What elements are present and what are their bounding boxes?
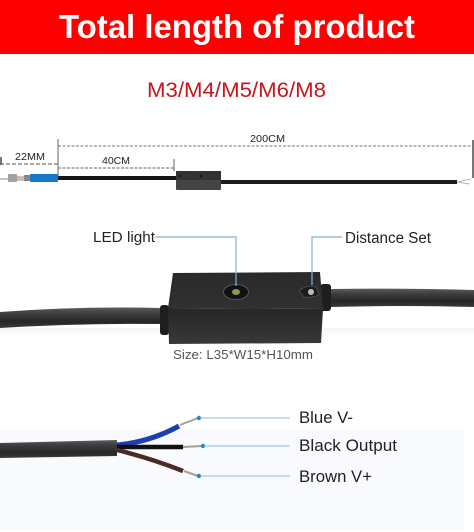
label: LED light (93, 229, 236, 286)
dimension: 40CM: 40CM (102, 155, 130, 167)
subtitle: thread sizes: M3/M4/M5/M6/M8 (147, 78, 326, 102)
distance dial (299, 286, 319, 297)
dimension: 22MM: 22MM (15, 151, 45, 163)
sensor box photo (0, 272, 474, 344)
label: Blue V-: Blue V- (299, 408, 353, 427)
brown wire (117, 450, 183, 471)
label: Brown V+ (197, 467, 372, 486)
stripped ends (180, 418, 202, 476)
dimension diagram (0, 133, 474, 190)
shadow under cable (0, 328, 474, 338)
cable to control box (58, 176, 176, 180)
cable to wire end (221, 179, 471, 184)
right collar (320, 284, 331, 311)
label: Brown V+: Brown V+ (299, 467, 372, 486)
left cable (0, 308, 160, 328)
left collar (160, 305, 169, 335)
label: Blue V- (197, 408, 353, 427)
box top face (168, 272, 323, 309)
label: LED light: LED light (93, 229, 156, 246)
box front face (168, 308, 323, 344)
label: Distance Set (312, 230, 432, 285)
title banner: Total length of product (59, 8, 415, 45)
blue wire (117, 426, 179, 445)
title banner (0, 0, 474, 54)
label: Black Output (201, 436, 397, 455)
label: Distance Set: Distance Set (345, 230, 432, 247)
icon: sensor probe with blue sleeve (0, 174, 58, 182)
black sheath (0, 440, 117, 458)
size caption: Size: L35*W15*H10mm (173, 348, 313, 362)
dimension: 40CM (58, 155, 174, 171)
label: Black Output: Black Output (299, 436, 397, 455)
LED light (224, 284, 248, 300)
control box small (176, 171, 221, 190)
right cable (331, 289, 474, 307)
dimension: 22MM (0, 151, 58, 165)
black wire (117, 445, 183, 449)
wire end photo (0, 418, 202, 476)
dimension: 200CM: 200CM (250, 133, 285, 145)
panel background: wire section (0, 430, 464, 530)
